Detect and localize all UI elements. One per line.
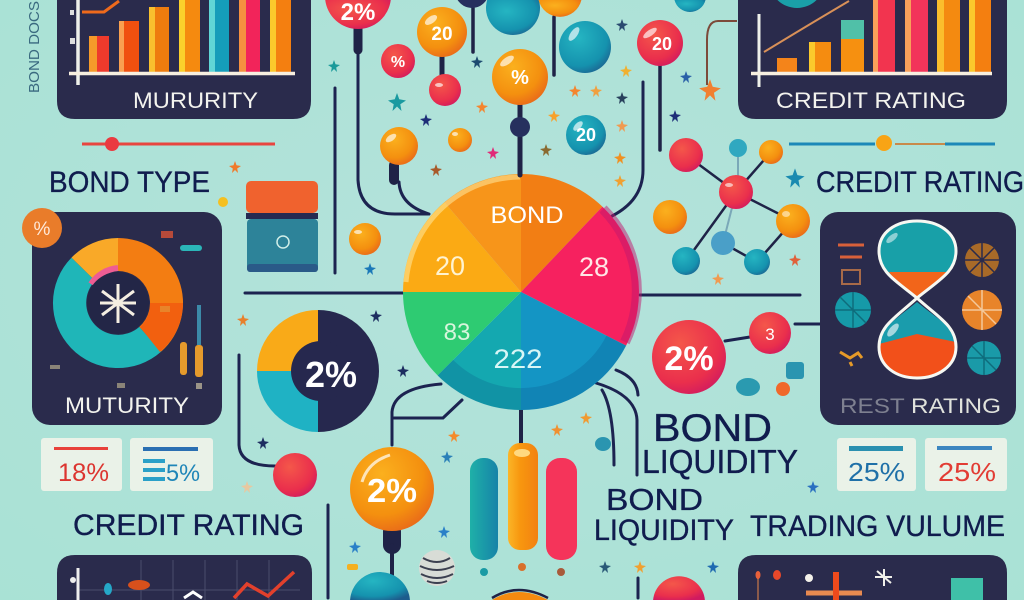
panel marks: [756, 569, 983, 600]
balloon: red orange connector: 3: [765, 325, 775, 344]
panel: maturity bar chart: [57, 0, 311, 119]
hourglass icon: [879, 221, 956, 378]
balloon: red 2%: [652, 320, 726, 394]
heading: bond liquidity large: LIQUIDITY: [642, 443, 798, 480]
balloon cluster: top: %: [391, 54, 405, 71]
tiny marks: [50, 231, 202, 389]
heading: credit rating lower: CREDIT RATING: [73, 509, 304, 542]
balloon cluster: top: [325, 0, 706, 255]
scattered stars: [218, 19, 819, 573]
badge: donut corner: [22, 208, 62, 248]
central pie chart: 20: [435, 251, 465, 281]
central pie chart: 83: [444, 319, 470, 346]
panel label: MUTURITY: [65, 393, 189, 418]
panel: line chart: [57, 555, 312, 600]
bars: [777, 0, 991, 73]
heading: trading volume: TRADING VULUME: [750, 510, 1005, 543]
bottom arc icon: [492, 590, 548, 600]
heading: bond type: BOND TYPE: [49, 166, 210, 199]
chart marks: [104, 580, 202, 598]
balloon: red 2%: 2%: [664, 340, 714, 378]
heading: bond liquidity second: BOND: [606, 482, 703, 517]
bars: [89, 0, 291, 72]
balloon cluster: top: 20: [652, 34, 672, 54]
big percent pie: 2%: [305, 354, 357, 395]
central pie chart: 28: [579, 252, 609, 282]
panel label: CREDIT RATING: [776, 88, 966, 113]
slider: blue orange: [789, 135, 995, 151]
balloon: small red lower left: [273, 453, 317, 497]
heading: bond liquidity large: BOND: [653, 407, 772, 450]
balloon: red orange connector: [749, 312, 791, 354]
big percent pie: [257, 310, 379, 432]
stat card: red: 18%: [58, 459, 109, 487]
stat card: blue 25: 25%: [848, 457, 905, 487]
balloon: large orange 2%: [350, 447, 434, 600]
central pie chart: 222: [494, 344, 542, 374]
stat card: blue: [130, 438, 213, 491]
heading: bond liquidity large: [642, 407, 798, 480]
chart line: [234, 572, 294, 598]
panel label: MURURITY: [133, 88, 258, 113]
stat card: red 25: 25%: [938, 457, 996, 487]
mini bars: [180, 305, 203, 377]
stat card: blue: 5%: [166, 460, 200, 487]
slider: red: [82, 137, 275, 151]
balloon: bottom red: [653, 576, 705, 600]
panel: credit rating bar chart: [738, 0, 1007, 119]
central pie chart: [403, 174, 639, 410]
balloon highlights: [354, 13, 658, 234]
panel label: REST RATING: [840, 395, 1001, 418]
balloon cluster: top: 20: [431, 24, 453, 45]
stat card: red: [41, 438, 122, 491]
balloon cluster: top: %: [511, 67, 529, 89]
balloon: large orange 2%: 2%: [367, 472, 417, 509]
panel: trading volume: [738, 555, 1007, 600]
side medallions: [835, 243, 1002, 375]
heading: bond liquidity second: [594, 482, 734, 547]
stat card: blue 25: [837, 438, 916, 491]
donut chart: [53, 238, 183, 368]
axes and trend line: [751, 1, 992, 87]
side caption: BOND DOCS: [26, 1, 43, 93]
connector lines: [239, 21, 820, 598]
heading: bond liquidity second: LIQUIDITY: [594, 514, 734, 547]
balloon cluster: top: 20: [576, 125, 596, 145]
icon: stacked block: [246, 181, 318, 272]
hatched ball: [419, 550, 455, 586]
pie labels: BOND: [490, 202, 564, 229]
stat card: red 25: [925, 438, 1007, 491]
axes and trend line: [69, 0, 295, 85]
capsules: [470, 410, 577, 576]
badge: donut corner: %: [34, 219, 51, 240]
panel: hourglass: [820, 212, 1016, 425]
panel: maturity donut: [32, 212, 222, 425]
molecule network: [653, 138, 810, 275]
